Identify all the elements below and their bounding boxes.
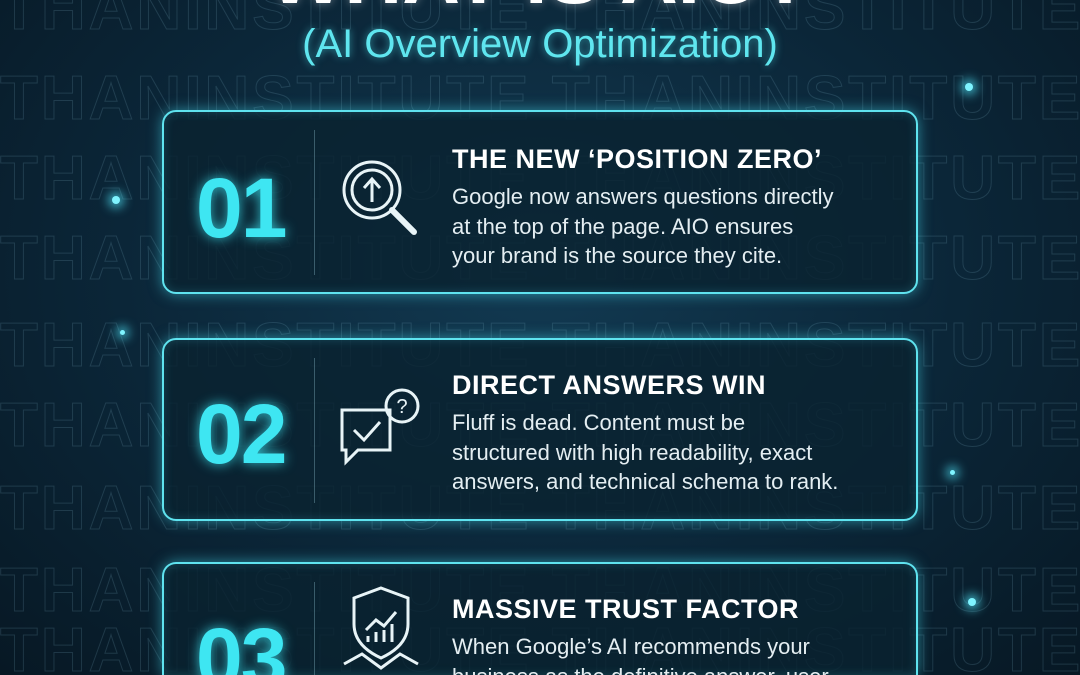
heading: MASSIVE TRUST FACTOR [452,594,799,624]
number 02: 02 [196,387,285,481]
panel: 03 [162,562,918,675]
body text: structured with high readability, exact [452,440,812,464]
icon: shield with chart and handshake [343,586,419,670]
heading: DIRECT ANSWERS WIN [452,370,766,400]
body text: answers, and technical schema to rank. [452,469,838,494]
body text: Fluff is dead. Content must be [452,410,745,435]
icon: magnifier with arrow [342,160,417,235]
body text [452,184,834,268]
body text [452,634,829,675]
body text [452,410,838,494]
subtitle: (AI Overview Optimization) [302,22,778,66]
panel: 02 [162,338,918,521]
number 01: 01 [196,161,285,255]
body text: When Google’s AI recommends your [452,634,810,659]
body text: Google now answers questions directly [452,184,834,209]
body text: your brand is the source they cite. [452,243,782,268]
panel: 01 [162,110,918,294]
icon: chat check [340,388,420,466]
icon: chat check: ? [396,396,408,418]
heading: THE NEW ‘POSITION ZERO’ [452,144,822,174]
body text: at the top of the page. AIO ensures [452,214,793,238]
